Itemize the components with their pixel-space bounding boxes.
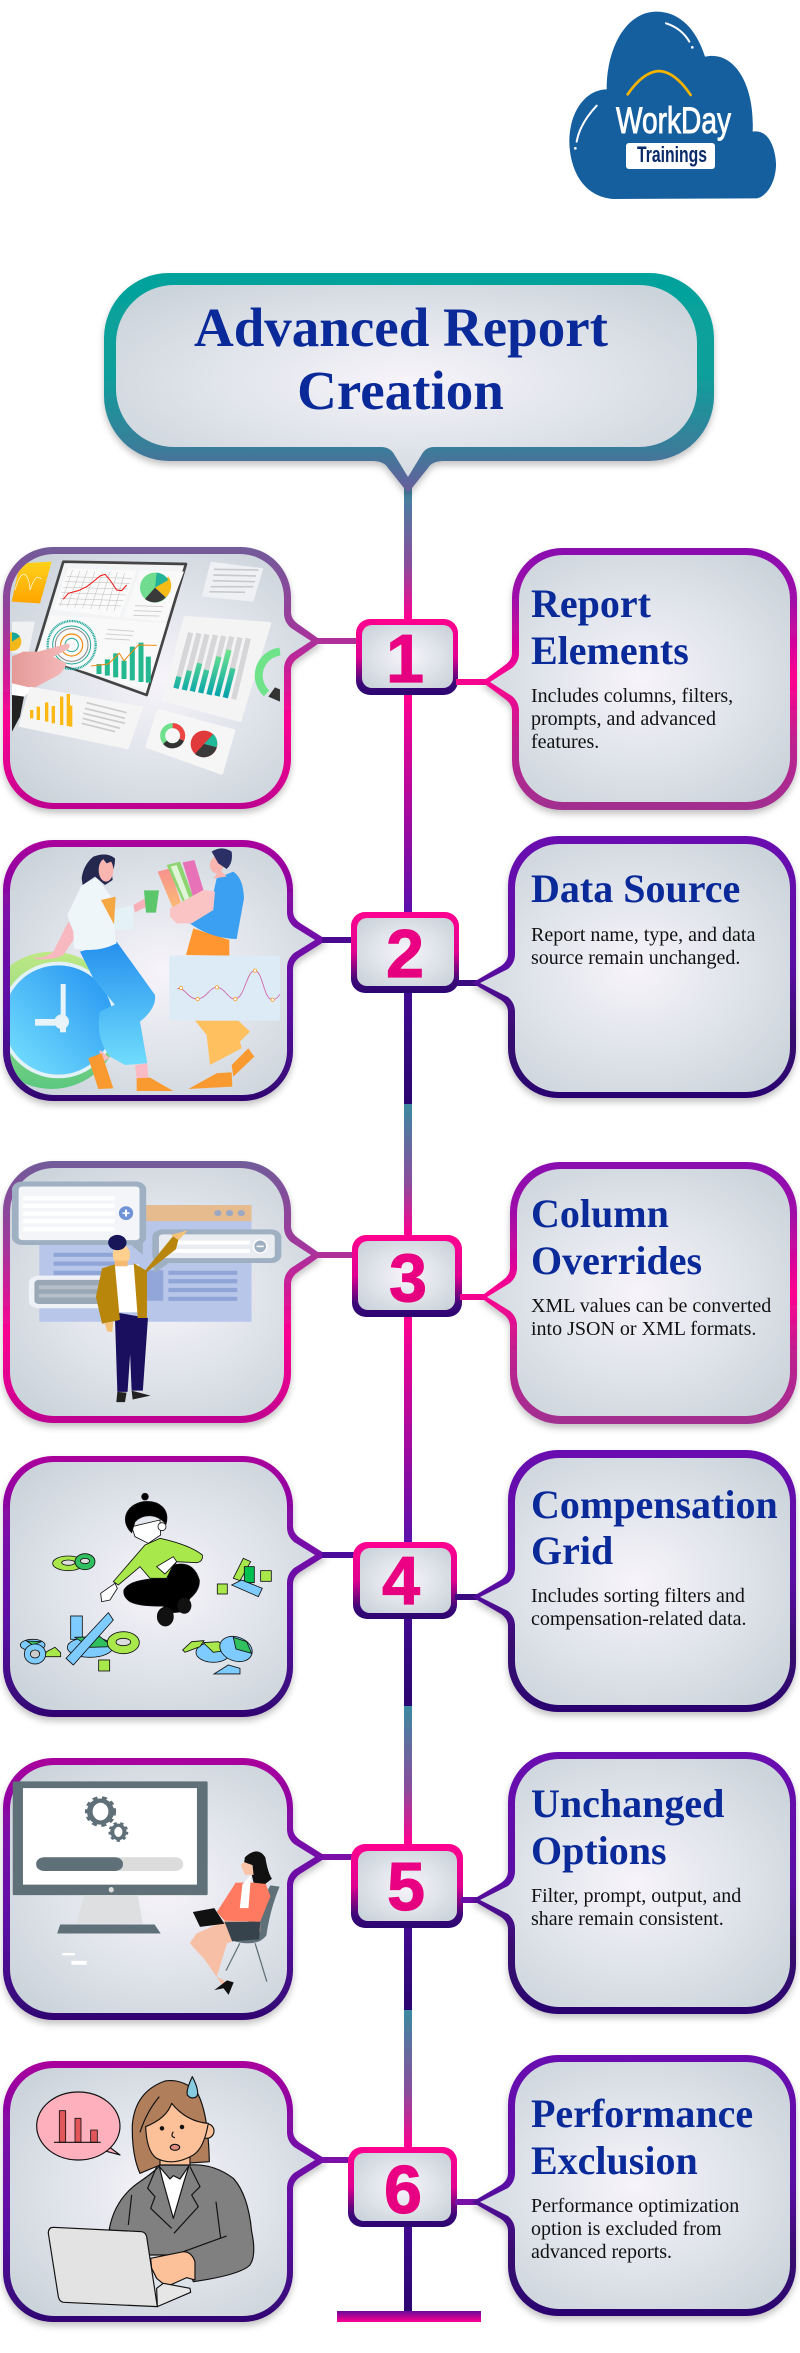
number badge 6: 6 [384, 2152, 422, 2228]
text panel: Report Elements: Includes columns, filters, [531, 685, 733, 707]
text panel: Performance Exclusion [455, 2055, 796, 2316]
image panel: boy sorting blocks and gears [3, 1456, 356, 1717]
text panel: Data Source: Data Source [531, 866, 740, 911]
number badge 5: 5 [387, 1849, 425, 1925]
step 5 [3, 1752, 796, 2020]
number badge 4 [353, 1542, 457, 1619]
text panel: Performance Exclusion: advanced reports. [531, 2241, 672, 2263]
number badge 5 [351, 1844, 463, 1928]
title callout [104, 273, 714, 493]
number badge 1: 1 [386, 621, 424, 697]
text panel: Report Elements: features. [531, 731, 599, 753]
timeline spine [404, 485, 412, 2311]
number badge 2 [351, 912, 459, 993]
text panel: Performance Exclusion: Performance [531, 2091, 753, 2136]
number badge 3 [352, 1235, 462, 1317]
logo: WorkDay Trainings cloud [569, 12, 776, 199]
text panel: Report Elements: prompts, and advanced [531, 708, 716, 730]
text panel: Performance Exclusion: Exclusion [531, 2138, 698, 2183]
step 4 [3, 1450, 796, 1717]
text panel: Column Overrides: XML values can be converted [531, 1295, 771, 1317]
text panel: Unchanged Options [461, 1752, 796, 2014]
text panel: Performance Exclusion: Performance optimization [531, 2195, 739, 2217]
text panel: Compensation Grid: Grid [531, 1528, 613, 1573]
number badge 2: 2 [386, 916, 424, 992]
text panel: Compensation Grid [455, 1450, 796, 1712]
title callout: Advanced Report [194, 297, 609, 358]
number badge 1 [356, 619, 458, 697]
text panel: Report Elements: Elements [531, 628, 689, 673]
text panel: Performance Exclusion: option is excluded from [531, 2218, 722, 2240]
title callout: Creation [297, 360, 504, 421]
number badge 4: 4 [382, 1543, 420, 1619]
text panel: Data Source: source remain unchanged. [531, 947, 740, 969]
text panel: Compensation Grid: compensation-related data. [531, 1608, 746, 1630]
timeline base bar [337, 2311, 481, 2322]
logo: WorkDay Trainings cloud: WorkDay [616, 100, 731, 141]
step 3 [3, 1161, 797, 1424]
step 1 [3, 547, 797, 810]
logo: WorkDay Trainings cloud: Trainings [637, 142, 707, 167]
text panel: Column Overrides: Column [531, 1191, 669, 1236]
image panel: man presenting screens [3, 1161, 354, 1423]
text panel: Compensation Grid: Compensation [531, 1482, 778, 1527]
text panel: Unchanged Options: Options [531, 1828, 667, 1873]
text panel: Column Overrides [460, 1162, 797, 1424]
text panel: Compensation Grid: Includes sorting filters and [531, 1585, 745, 1607]
image panel: worried woman at laptop [3, 2061, 352, 2322]
image panel: two people with clock and chart [0, 840, 354, 1101]
text panel: Data Source [457, 836, 796, 1098]
text panel: Column Overrides: into JSON or XML formats. [531, 1318, 756, 1340]
text panel: Unchanged Options: Filter, prompt, output, and [531, 1885, 741, 1907]
number badge 6 [348, 2147, 457, 2228]
text panel: Unchanged Options: share remain consistent. [531, 1908, 724, 1930]
image panel: woman with laptop and monitor [3, 1758, 354, 2020]
text panel: Data Source: Report name, type, and data [531, 924, 755, 946]
text panel: Column Overrides: Overrides [531, 1238, 702, 1283]
text panel: Unchanged Options: Unchanged [531, 1781, 724, 1826]
step 6 [3, 2055, 796, 2322]
text panel: Report Elements [456, 548, 797, 810]
step 2 [0, 836, 796, 1101]
text panel: Report Elements: Report [531, 581, 652, 626]
number badge 3: 3 [389, 1240, 427, 1316]
image panel: dashboards on a tablet [3, 547, 358, 809]
